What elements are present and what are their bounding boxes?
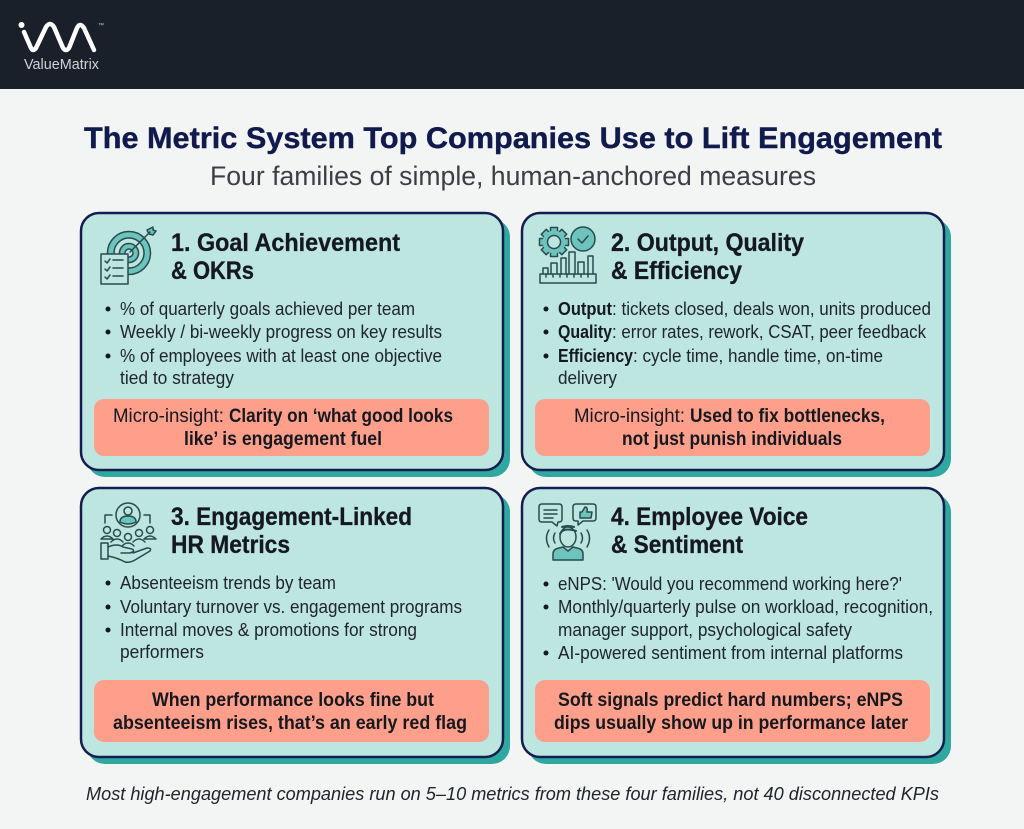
heading: & Efficiency [611,257,742,285]
callout: soft signals: Soft signals predict hard numbers; eNPS [558,690,903,711]
bullet list [106,299,442,388]
logo: ValueMatrix: ™ [98,22,104,29]
callout: micro-insight: Used to fix bottlenecks, [690,406,885,427]
heading: & OKRs [171,257,254,285]
bullet list: Voluntary turnover vs. engagement programs [120,597,462,617]
heading: 1. Goal Achievement [171,229,401,257]
bullet list: Output [558,299,612,319]
callout: micro-insight: like’ is engagement fuel [184,429,382,450]
header bar with logo [0,0,1024,89]
bullet list: AI-powered sentiment from internal platforms [558,643,903,663]
panel: employee voice and sentiment [522,488,951,764]
bullet list: % of employees with at least one objective [120,346,442,366]
title: The Metric System Top Companies Use to Lift Engagement [84,122,942,155]
subtitle: Four families of simple, human-anchored measures [210,161,816,191]
bullet list [106,573,462,662]
bullet list: Weekly / bi-weekly progress on key results [120,322,442,342]
heading: 3. Engagement-Linked [171,503,412,531]
panel: engagement-linked HR metrics [81,488,510,764]
logo: ValueMatrix: ValueMatrix [24,57,100,73]
callout: early red flag [94,680,489,742]
logo: ValueMatrix [18,22,104,73]
footer note: Most high-engagement companies run on 5–10 metrics from these four families, not 40 disconnected KPIs [86,784,939,804]
bullet list [544,574,933,663]
callout: early red flag: absenteeism rises, that’s an early red flag [113,713,467,734]
bullet list: eNPS: 'Would you recommend working here?' [558,574,902,594]
bullet list [544,299,931,388]
callout: micro-insight: Micro-insight: [574,406,685,427]
icon: person with speech bubbles [539,504,596,560]
bullet list: : error rates, rework, CSAT, peer feedback [612,322,927,342]
bullet list: Quality [558,322,612,342]
panel: goal achievement and OKRs [81,213,510,477]
icon: gear, check and bar chart [540,227,596,283]
bullet list: performers [120,642,204,662]
callout: micro-insight [94,399,489,456]
callout: soft signals [535,680,930,742]
bullet list: % of quarterly goals achieved per team [120,299,415,319]
callout: micro-insight [535,399,930,456]
heading: HR Metrics [171,531,290,559]
bullet list: manager support, psychological safety [558,620,852,640]
heading: & Sentiment [611,531,744,559]
heading [611,229,804,285]
callout: micro-insight: not just punish individuals [622,429,842,450]
callout: soft signals: dips usually show up in performance later [554,713,909,734]
bullet list: Absenteeism trends by team [120,573,336,593]
bullet list: delivery [558,368,617,388]
heading: 4. Employee Voice [611,503,808,531]
bullet list: : tickets closed, deals won, units produced [612,299,931,319]
heading: 2. Output, Quality [611,229,804,257]
heading [171,503,412,559]
bullet list: : cycle time, handle time, on-time [633,346,883,366]
bullet list: Internal moves & promotions for strong [120,620,417,640]
bullet list: Monthly/quarterly pulse on workload, recognition, [558,597,933,617]
callout: early red flag: When performance looks fine but [152,690,435,711]
heading [611,503,808,559]
bullet list: tied to strategy [120,368,234,388]
callout: micro-insight: Clarity on ‘what good looks [229,406,453,427]
bullet list: Efficiency [558,346,633,366]
callout: micro-insight: Micro-insight: [113,406,224,427]
icon: target and checklist [101,227,156,284]
panel: output, quality and efficiency [522,213,951,477]
icon: people and hand [101,503,156,562]
heading [171,229,401,285]
